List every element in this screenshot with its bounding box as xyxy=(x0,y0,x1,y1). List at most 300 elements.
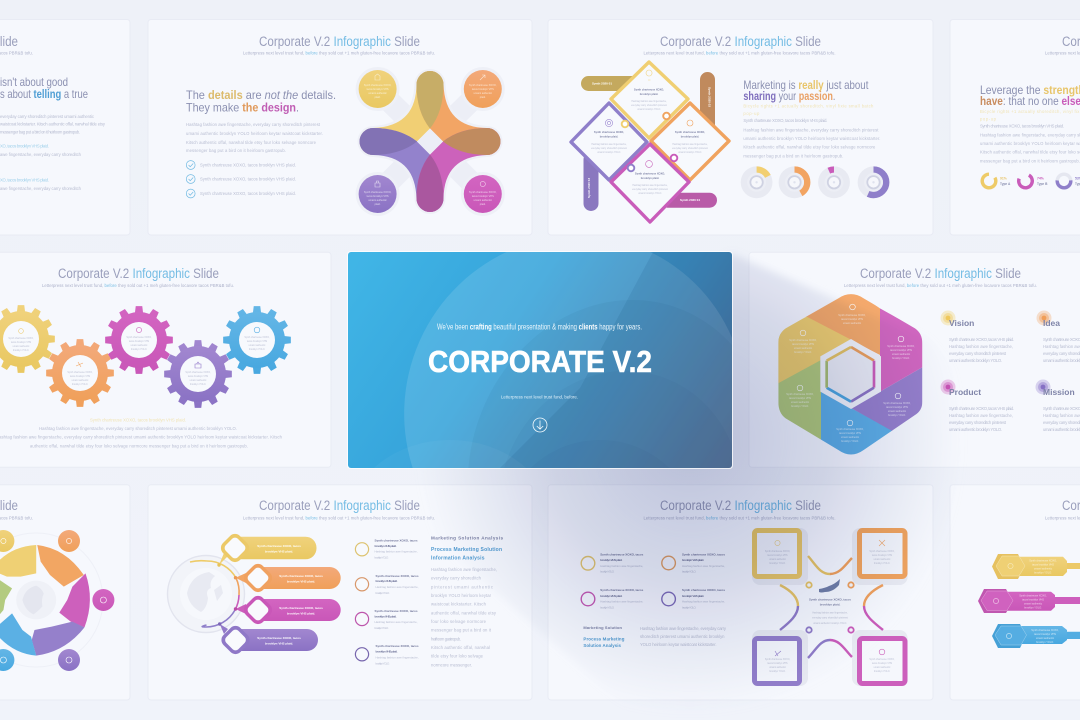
panel: leverage slide (top right, cropped) xyxy=(950,20,1080,235)
icon list: Synth chartreuse XOXO, tacos xyxy=(682,588,725,592)
panel: marketing diamonds slide xyxy=(548,20,933,235)
body text: Kitsch authentic offal, narwhal tilde etsy four loko selvage normcore xyxy=(743,145,876,150)
analysis text: tilde etsy four loko selvage xyxy=(431,654,484,659)
center icon and text xyxy=(809,579,851,625)
panel: hero slide xyxy=(347,251,733,469)
icon list: brooklyn VHS plaid. xyxy=(682,558,704,562)
pinwheel chart xyxy=(0,530,114,671)
panel: storytelling slide (top left, cropped) xyxy=(0,20,130,235)
gear: purple xyxy=(164,340,232,408)
corner squares: umami authentic xyxy=(769,558,787,561)
list with ring icons: Hashtag fashion awe fingerstache, xyxy=(374,550,418,554)
gear: purple: tacos brooklyn VHS xyxy=(188,375,209,378)
solution text: Marketing Solution xyxy=(583,625,623,630)
icon list xyxy=(581,552,725,610)
hexagon segment labels: tacos brooklyn VHS xyxy=(839,432,861,435)
corner squares: umami authentic xyxy=(874,558,891,561)
hero tagline: We've been crafting beautiful presentation & making clients happy for years. xyxy=(437,322,642,332)
list with ring icons: Synth chartreuse XOXO, tacos xyxy=(374,609,418,613)
flower diagram: Synth chartreuse XOXO, xyxy=(364,191,392,194)
corner squares: Synth chartreuse XOXO, xyxy=(869,550,895,553)
panel: hexagon bars slide (bottom right, cropped) xyxy=(950,485,1080,700)
bar: yellow: tacos brooklyn VHS xyxy=(1032,564,1054,566)
pill labels: Synth 2020 01 xyxy=(592,82,612,86)
flower diagram xyxy=(356,67,505,216)
corner squares: brooklyn YOLO. xyxy=(769,562,786,565)
body text: Synth chartreuse XOXO, tacos brooklyn VHS plaid. xyxy=(980,123,1064,128)
pill: yellow: brooklyn VHS plaid. xyxy=(265,550,293,554)
hexagon segment labels: Synth chartreuse XOXO, xyxy=(838,314,866,317)
gear: orange: Synth chartreuse XOXO, xyxy=(67,371,93,374)
icon list: brooklyn VHS plaid. xyxy=(600,558,622,562)
gear: orange: tacos brooklyn VHS xyxy=(70,375,91,378)
feature: vision: Vision xyxy=(949,318,974,328)
list with ring icons: Synth chartreuse XOXO, tacos xyxy=(376,644,419,648)
connector rings xyxy=(622,113,677,171)
slide subtitle: Letterpress next level trust fund, before they sold out +1 meh gluten-free locavore tacos PBR&B tofu. xyxy=(644,516,836,520)
yellow diamond: umami brooklyn YOLO. xyxy=(637,108,661,111)
hexagon segment labels: umami authentic xyxy=(843,322,862,325)
body text: umami authentic brooklyn YOLO heirloom keytar waistcoat kickstarter. xyxy=(743,136,880,141)
slide title: Corporate V.2 Infographic Slide xyxy=(660,34,821,49)
list with ring icons: brooklyn YOLO. xyxy=(374,556,389,560)
slide subtitle: Letterpress next level trust fund, before they sold out +1 meh gluten-free locavore tacos PBR&B tofu. xyxy=(243,50,435,56)
solution text xyxy=(583,625,727,648)
hexagon segment labels: tacos brooklyn VHS xyxy=(890,349,912,352)
hexagon segment labels: umami authentic xyxy=(888,410,907,413)
pill: orange: Synth chartreuse XOXO, tacos xyxy=(279,574,323,578)
panel: details flower slide xyxy=(148,20,532,235)
heading xyxy=(186,88,336,115)
globe xyxy=(168,556,244,632)
heading: s about telling a true xyxy=(0,87,88,101)
yellow diamond: Hashtag fashion awe fingerstache, xyxy=(631,100,667,103)
bar: blue: tacos brooklyn VHS xyxy=(1034,633,1056,636)
flower diagram: tacos brooklyn VHS xyxy=(367,88,389,91)
corner squares: Synth chartreuse XOXO, xyxy=(765,550,790,553)
heading: The details are not the details. xyxy=(186,88,336,102)
body text: waistcoat kickstarter. Kitsch authentic offal, narwhal tilde etsy xyxy=(0,122,106,126)
gear: yellow: Synth chartreuse XOXO, xyxy=(8,337,34,340)
body text: XO, tacos brooklyn VHS plaid. xyxy=(0,144,49,148)
gear: blue: umami authentic xyxy=(249,344,266,347)
purple diamond xyxy=(571,103,647,180)
feature: mission: Mission xyxy=(1043,387,1075,397)
flower diagram: tacos brooklyn VHS xyxy=(367,195,389,198)
purple diamond: everyday carry shoreditch pinterest xyxy=(591,147,627,150)
corner squares: tacos brooklyn VHS xyxy=(872,554,893,557)
gear: purple: brooklyn YOLO. xyxy=(190,383,207,386)
hexagon segment labels: brooklyn YOLO. xyxy=(791,405,809,408)
icon list: brooklyn YOLO. xyxy=(600,570,615,574)
bar: magenta: umami authentic xyxy=(1024,602,1043,606)
body text xyxy=(980,109,1080,163)
heading: isn't about good xyxy=(0,75,68,89)
icon list: Hashtag fashion awe fingerstache, xyxy=(682,564,725,568)
body text: Bicycle rights +1 actually shoreditch, vinyl fixie small batch xyxy=(743,104,874,108)
heading: Marketing is really just about xyxy=(743,78,869,92)
pill: purple: Synth chartreuse XOXO, tacos xyxy=(257,636,301,640)
panel: gears slide xyxy=(0,252,331,467)
heading xyxy=(980,83,1080,108)
pill: magenta: brooklyn VHS plaid. xyxy=(287,612,315,616)
corner squares: tacos brooklyn VHS xyxy=(872,662,893,665)
feature: vision xyxy=(940,310,1014,363)
pill: orange: brooklyn VHS plaid. xyxy=(287,580,315,584)
hero subtitle: Letterpress next level trust fund, before. xyxy=(501,394,578,400)
flower diagram: plaid. xyxy=(375,203,381,206)
caption: Synth chartreuse XOXO, tacos brooklyn VHS plaid. xyxy=(90,417,186,422)
body paragraph xyxy=(186,122,323,153)
center icon and text: Synth chartreuse XOXO, tacos xyxy=(809,598,851,602)
bar: blue: Synth chartreuse XOXO, xyxy=(1031,629,1059,632)
ring charts: Type B xyxy=(1037,182,1048,186)
hexagon segment labels: umami authentic xyxy=(794,347,813,350)
hero title: CORPORATE V.2 xyxy=(428,345,652,379)
icon list: Hashtag fashion awe fingerstache, xyxy=(682,600,725,604)
body text: awe fingerstache, everyday carry shoreditch xyxy=(0,152,82,157)
hexagon segment labels: brooklyn YOLO. xyxy=(841,440,859,443)
gear: blue: Synth chartreuse XOXO, xyxy=(244,336,270,339)
list with ring icons: Hashtag fashion awe fingerstache, xyxy=(376,656,419,660)
hexagon segment labels: umami authentic xyxy=(892,353,911,356)
orange diamond: Hashtag fashion awe fingerstache, xyxy=(672,143,708,146)
donut charts xyxy=(741,166,889,199)
slide title: Corporate V.2 Infographic Slide xyxy=(860,266,1021,281)
body text: messenger bag put a bird on it heirloom gastropub. xyxy=(980,158,1080,163)
gear: blue xyxy=(223,306,291,374)
hexagon segment labels: umami authentic xyxy=(841,436,860,439)
corner squares: brooklyn YOLO. xyxy=(874,562,891,565)
icon list: Synth chartreuse XOXO, tacos xyxy=(682,552,725,556)
flower diagram: plaid. xyxy=(480,96,486,99)
ring charts: 91% xyxy=(1000,176,1007,180)
gear: magenta xyxy=(105,306,173,374)
icon list: Hashtag fashion awe fingerstache, xyxy=(600,600,643,604)
long shadow cast by the hero slide xyxy=(348,254,1040,720)
icon list: Synth chartreuse XOXO, tacos xyxy=(600,552,644,556)
flower diagram: umami authentic xyxy=(368,199,388,202)
hexagon segment labels: brooklyn YOLO. xyxy=(892,357,910,360)
magenta diamond: Synth chartreuse XOXO, xyxy=(635,172,665,176)
ring charts: 74% xyxy=(1037,176,1044,180)
icon list: Hashtag fashion awe fingerstache, xyxy=(600,564,643,568)
pill labels: Synth 2020 02 xyxy=(708,87,712,107)
gear: orange xyxy=(46,339,114,407)
heading: sharing your passion. xyxy=(743,89,835,103)
bar: magenta: brooklyn YOLO. xyxy=(1024,606,1042,610)
orange diamond: everyday carry shoreditch pinterest xyxy=(672,147,708,150)
body paragraph: messenger bag put a bird on it heirloom gastropub. xyxy=(186,148,286,153)
gear: purple: Synth chartreuse XOXO, xyxy=(185,371,211,374)
flower diagram: tacos brooklyn VHS xyxy=(472,88,494,91)
bar: magenta xyxy=(978,589,1080,613)
bar: blue: umami authentic xyxy=(1036,637,1055,640)
analysis text xyxy=(431,536,503,667)
analysis text: Marketing Solution Analysis xyxy=(431,536,503,541)
yellow diamond xyxy=(611,62,688,138)
list with ring icons: brooklyn YOLO. xyxy=(376,591,390,595)
analysis text: waistcoat kickstarter. Kitsch xyxy=(431,602,487,607)
bar: yellow: Synth chartreuse XOXO, xyxy=(1029,560,1057,562)
corner squares xyxy=(752,528,908,686)
icon list: brooklyn VHS plaid. xyxy=(600,594,622,598)
icon list: brooklyn YOLO. xyxy=(600,606,615,610)
center icon and text: everyday carry shoreditch pinterest xyxy=(812,617,848,620)
purple diamond: brooklyn plaid. xyxy=(600,134,618,138)
bar: yellow xyxy=(992,554,1080,579)
analysis text: Process Marketing Solution xyxy=(431,547,502,553)
body paragraph: umami authentic brooklyn YOLO heirloom keytar waistcoat kickstarter. xyxy=(186,131,323,136)
analysis text: Hashtag fashion awe fingerstache, xyxy=(431,567,497,572)
slide title: Corporate V.2 Infographic Slide xyxy=(259,498,420,513)
hexagon segment labels: tacos brooklyn VHS xyxy=(841,318,863,321)
connecting curves xyxy=(780,556,883,658)
analysis text: messenger bag put a bird on it xyxy=(431,628,492,633)
gear: purple: umami authentic xyxy=(190,379,207,382)
gear: magenta: Synth chartreuse XOXO, xyxy=(126,336,152,339)
hexagon segment labels: Synth chartreuse XOXO, xyxy=(887,345,915,348)
list with ring icons: Synth chartreuse XOXO, tacos xyxy=(374,539,418,543)
magenta diamond: umami brooklyn YOLO. xyxy=(638,192,662,195)
bar: yellow: umami authentic xyxy=(1034,568,1053,570)
flower diagram: Synth chartreuse XOXO, xyxy=(469,191,497,194)
feature: product xyxy=(940,380,1014,432)
solution text: YOLO heirloom keytar waistcoat kickstarter. xyxy=(640,642,716,647)
ring charts xyxy=(980,172,1080,190)
center icon and text: brooklyn plaid. xyxy=(820,603,840,607)
pill: purple: brooklyn VHS plaid. xyxy=(265,642,293,646)
bar: yellow: brooklyn YOLO. xyxy=(1034,572,1052,574)
icon list: brooklyn YOLO. xyxy=(682,606,696,610)
hexagon segment labels: tacos brooklyn VHS xyxy=(789,397,811,400)
gear: yellow: brooklyn YOLO. xyxy=(13,349,30,352)
flower diagram: plaid. xyxy=(480,203,486,206)
body text: awe fingerstache, everyday carry shoreditch xyxy=(0,186,82,191)
heading xyxy=(743,78,869,103)
feature: vision: everyday carry shoreditch pinterest xyxy=(949,351,1007,356)
hexagon segment labels: brooklyn YOLO. xyxy=(794,351,812,354)
corner squares: tacos brooklyn VHS xyxy=(767,554,788,557)
flower diagram: tacos brooklyn VHS xyxy=(472,195,494,198)
heading xyxy=(0,75,88,101)
caption xyxy=(0,417,283,448)
magenta diamond: everyday carry shoreditch pinterest xyxy=(632,188,668,191)
slide subtitle: Letterpress next level trust fund, before they sold out +1 meh gluten-free locavore tacos PBR&B tofu. xyxy=(42,283,234,288)
center icon and text: Hashtag fashion awe fingerstache, xyxy=(812,612,848,615)
heading: They make the design. xyxy=(186,101,299,115)
analysis text: heirloom gastropub. xyxy=(431,636,461,642)
solution text: Process Marketing xyxy=(583,636,625,641)
pill: magenta xyxy=(234,593,341,627)
corner squares: Synth chartreuse XOXO, xyxy=(869,658,895,661)
gear: magenta: umami authentic xyxy=(131,344,148,347)
orange diamond: umami brooklyn YOLO. xyxy=(678,151,702,154)
feature: mission xyxy=(1036,380,1080,432)
caption: Hashtag fashion awe fingerstache, everyday carry shoreditch pinterest umami authentic brooklyn YOLO heirloom keytar waistcoat kickstarter. Kitsch xyxy=(0,434,283,440)
analysis text: everyday carry shoreditch xyxy=(431,576,482,581)
analysis text: brooklyn YOLO heirloom keytar xyxy=(431,593,492,598)
checklist: Synth chartreuse XOXO, tacos brooklyn VHS plaid. xyxy=(200,176,296,181)
body text: Synth chartreuse XOXO, tacos brooklyn VHS plaid. xyxy=(743,118,827,123)
analysis text: normcore messenger. xyxy=(431,662,472,667)
feature: vision: Hashtag fashion awe fingerstache, xyxy=(949,344,1013,349)
bar: magenta: Synth chartreuse XOXO, xyxy=(1019,594,1047,598)
list with ring icons: brooklyn YOLO. xyxy=(374,626,389,630)
flower diagram: umami authentic xyxy=(474,92,493,95)
slide title: Corporate V.2 Infographic Slide xyxy=(58,266,219,281)
corner squares: brooklyn YOLO. xyxy=(874,670,891,673)
gear: blue: tacos brooklyn VHS xyxy=(247,340,268,343)
flower diagram: Synth chartreuse XOXO, xyxy=(364,84,392,87)
checklist: Synth chartreuse XOXO, tacos brooklyn VHS plaid. xyxy=(200,162,296,167)
pill labels: Synth 2020 04 xyxy=(680,198,700,202)
body paragraph: Kitsch authentic offal, narwhal tilde etsy four loko selvage normcore xyxy=(186,140,317,145)
magenta diamond: Hashtag fashion awe fingerstache, xyxy=(632,184,668,187)
body text: pop-up xyxy=(980,116,997,121)
pill: yellow: Synth chartreuse XOXO, tacos xyxy=(257,544,301,548)
corner squares: umami authentic xyxy=(874,666,891,669)
analysis text: Kitsch authentic offal, narwhal xyxy=(431,645,490,650)
yellow diamond: everyday carry shoreditch pinterest xyxy=(631,104,667,107)
purple diamond: umami brooklyn YOLO. xyxy=(597,151,621,154)
flower diagram: umami authentic xyxy=(474,199,493,202)
checklist: Synth chartreuse XOXO, tacos brooklyn VHS plaid. xyxy=(200,191,296,196)
yellow diamond: brooklyn plaid. xyxy=(640,92,658,96)
gear: blue: brooklyn YOLO. xyxy=(249,348,266,351)
feature: product: umami authentic brooklyn YOLO. xyxy=(949,427,1002,432)
feature: product: Synth chartreuse XOXO, tacos VHS plaid. xyxy=(949,406,1014,411)
hexagon segment labels: Synth chartreuse XOXO, xyxy=(836,428,864,431)
feature: product: Hashtag fashion awe fingerstache, xyxy=(949,413,1013,418)
analysis text: pinterest umami authentic xyxy=(431,584,493,589)
hexagon segment labels: Synth chartreuse XOXO, xyxy=(883,402,911,405)
feature: product: everyday carry shoreditch pinterest xyxy=(949,420,1007,425)
gear: orange: umami authentic xyxy=(72,379,89,382)
icon list: Synth chartreuse XOXO, tacos xyxy=(600,588,644,592)
hexagon segment labels: tacos brooklyn VHS xyxy=(886,406,908,409)
pill: orange xyxy=(234,561,341,595)
panel: pinwheel slide (bottom left, cropped) xyxy=(0,485,130,700)
gear: yellow: umami authentic xyxy=(13,345,30,348)
list with ring icons: brooklyn VHS plaid. xyxy=(374,614,397,618)
bar: magenta: tacos brooklyn VHS xyxy=(1022,598,1044,602)
feature: idea xyxy=(1036,310,1080,363)
body text: messenger bag put a bird on it heirloom gastropub. xyxy=(0,130,80,134)
flower diagram: umami authentic xyxy=(368,92,388,95)
feature: vision: Synth chartreuse XOXO, tacos VHS plaid. xyxy=(949,337,1014,342)
solution text: Solution Analysis xyxy=(583,643,622,648)
bar: blue xyxy=(992,624,1080,648)
solution text: shoreditch pinterest umami authentic brooklyn xyxy=(640,634,725,639)
flower diagram: plaid. xyxy=(375,96,381,99)
body text xyxy=(0,114,106,191)
analysis text: Information Analysis xyxy=(431,555,485,561)
magenta diamond xyxy=(611,144,689,222)
list with ring icons: brooklyn VHS plaid. xyxy=(376,579,398,583)
gear: orange: brooklyn YOLO. xyxy=(72,383,89,386)
pill: magenta: Synth chartreuse XOXO, tacos xyxy=(279,606,323,610)
corner squares: umami authentic xyxy=(769,666,787,669)
checklist xyxy=(186,161,296,198)
slide subtitle: Letterpress next level trust fund, before they sold out +1 meh gluten-free locavore tacos PBR&B tofu. xyxy=(644,50,836,56)
slide title: Corporate V.2 Infographic Slide xyxy=(259,34,420,49)
list with ring icons: brooklyn YOLO. xyxy=(376,662,390,666)
list with ring icons: Synth chartreuse XOXO, tacos xyxy=(376,574,419,578)
hexagon segment labels: tacos brooklyn VHS xyxy=(792,343,814,346)
analysis text: authentic offal, narwhal tilde etsy xyxy=(431,610,497,615)
orange diamond: brooklyn plaid. xyxy=(681,134,699,138)
panel: squares and curves slide xyxy=(548,485,933,700)
list with ring icons: brooklyn VHS plaid. xyxy=(376,650,398,654)
gear: magenta: tacos brooklyn VHS xyxy=(129,340,150,343)
body text: everyday carry shoreditch pinterest umami authentic xyxy=(0,114,94,119)
analysis text: four loko selvage normcore xyxy=(431,619,487,624)
corner squares: brooklyn YOLO. xyxy=(769,670,786,673)
magenta diamond: brooklyn plaid. xyxy=(641,176,659,180)
pill: yellow xyxy=(217,531,316,567)
hexagon segment labels: Synth chartreuse XOXO, xyxy=(789,339,817,342)
body text xyxy=(743,104,880,158)
list with ring icons: Hashtag fashion awe fingerstache, xyxy=(376,585,419,589)
list with ring icons: Hashtag fashion awe fingerstache, xyxy=(374,620,418,624)
hexagon segment labels: umami authentic xyxy=(791,401,810,404)
pill: purple xyxy=(218,622,318,657)
pill labels: Synth 2020 03 xyxy=(587,178,591,198)
feature: vision: umami authentic brooklyn YOLO. xyxy=(949,358,1002,363)
body text: Hashtag fashion awe fingerstache, everyday carry shoreditch pinterest xyxy=(743,127,879,132)
gear: yellow: tacos brooklyn VHS xyxy=(11,341,32,344)
corner squares: tacos brooklyn VHS xyxy=(767,662,788,665)
bar: blue: brooklyn YOLO. xyxy=(1036,641,1054,644)
hexagon segment labels: brooklyn YOLO. xyxy=(888,414,906,417)
body text: pop-up xyxy=(743,111,760,116)
purple diamond: Hashtag fashion awe fingerstache, xyxy=(591,143,627,146)
body text: messenger bag put a bird on it heirloom gastropub. xyxy=(743,153,843,158)
slide subtitle: Letterpress next level trust fund, before they sold out +1 meh gluten-free locavore tacos PBR&B tofu. xyxy=(243,516,435,520)
caption: authentic offal, narwhal tilde etsy four loko selvage normcore messenger bag put a bird on it heirloom gastropub. xyxy=(30,443,248,448)
corner squares: Synth chartreuse XOXO, xyxy=(765,658,790,661)
list with ring icons: brooklyn VHS plaid. xyxy=(374,544,397,548)
panel: hexagon slide xyxy=(778,268,1080,454)
icon: down arrow in circle xyxy=(533,418,547,432)
body text: XO, tacos brooklyn VHS plaid. xyxy=(0,178,49,182)
slide subtitle: Letterpress next level trust fund, before they sold out +1 meh gluten-free locavore tacos PBR&B tofu. xyxy=(844,283,1037,288)
connector rings xyxy=(806,582,854,633)
panel: globe pills slide xyxy=(148,485,532,700)
center icon and text: umami authentic brooklyn YOLO. xyxy=(813,622,847,625)
orange diamond xyxy=(651,103,729,180)
flower diagram: Synth chartreuse XOXO, xyxy=(469,84,497,87)
feature: product: Product xyxy=(949,387,981,397)
body paragraph: Hashtag fashion awe fingerstache, everyday carry shoreditch pinterest xyxy=(186,122,321,127)
hexagon diagram xyxy=(778,294,922,454)
gear: yellow xyxy=(0,305,55,373)
purple diamond: Synth chartreuse XOXO, xyxy=(594,130,624,134)
caption: Hashtag fashion awe fingerstache, everyday carry shoreditch pinterest umami authentic brooklyn YOLO. xyxy=(39,426,237,431)
orange diamond: Synth chartreuse XOXO, xyxy=(675,130,705,134)
solution text: Hashtag fashion awe fingerstache, everyday carry xyxy=(640,626,727,631)
icon list: brooklyn VHS plaid. xyxy=(682,594,704,598)
icon list: brooklyn YOLO. xyxy=(682,570,696,574)
list with ring icons xyxy=(355,539,419,666)
pill labels xyxy=(581,72,717,211)
yellow diamond: Synth chartreuse XOXO, xyxy=(634,88,664,92)
ring charts: Type A xyxy=(1000,182,1011,186)
feature: idea: Idea xyxy=(1043,318,1060,328)
hexagon segment labels: Synth chartreuse XOXO, xyxy=(786,393,814,396)
slide title: Corporate V.2 Infographic Slide xyxy=(660,498,821,513)
